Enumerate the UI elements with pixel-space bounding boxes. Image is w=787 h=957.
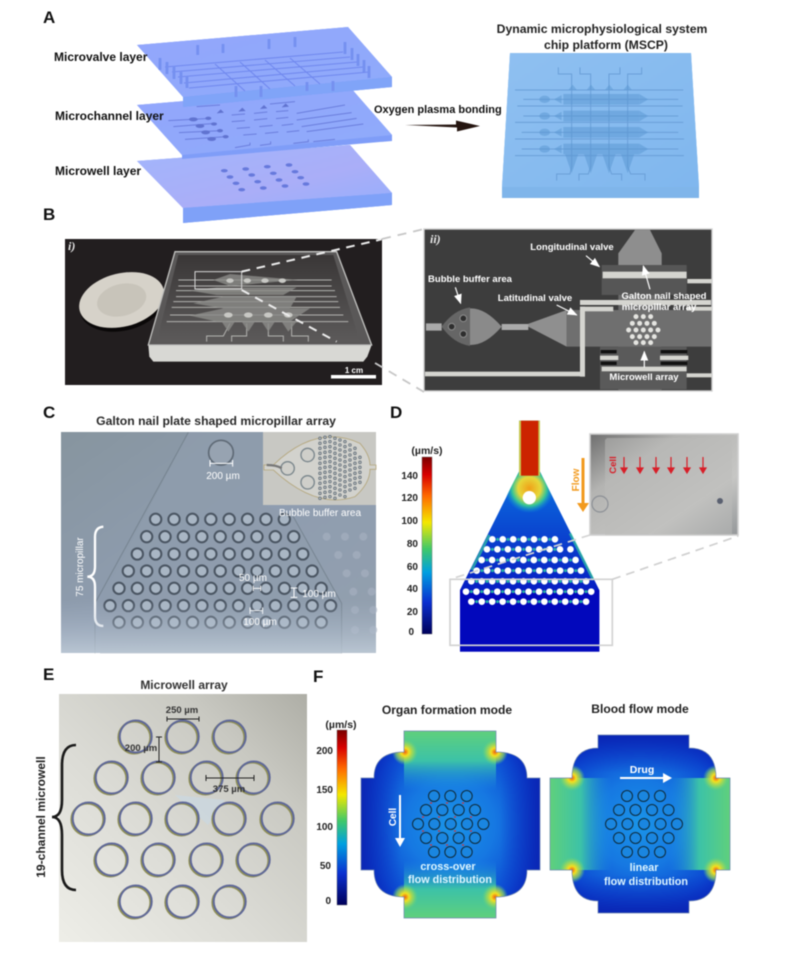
panel E: microwell array [34, 665, 307, 942]
faint background dots [327, 537, 375, 630]
drug arrow [620, 764, 672, 783]
letter B: B [43, 205, 55, 224]
dimension text: 250 µm [166, 705, 198, 716]
coin [73, 264, 171, 340]
microwell rings [71, 720, 294, 918]
rotated label E: 19-channel microwell [34, 756, 48, 878]
panel B: photographs [43, 205, 712, 392]
dimension text: 375 µm [213, 784, 245, 795]
letter F: F [313, 667, 323, 686]
C labels: 75 micropillar [75, 537, 86, 597]
well dots [221, 163, 309, 191]
colorbar D: 80 [407, 539, 418, 550]
dimension text [125, 705, 245, 795]
layer labels [54, 50, 164, 178]
microvalve layer plate [137, 27, 392, 107]
red arrows [621, 457, 706, 473]
C labels: 100 µm [243, 617, 277, 628]
mode caption [408, 861, 492, 886]
letter D: D [390, 403, 402, 422]
colorbar D: 100 [401, 516, 418, 527]
brace E [52, 745, 76, 890]
letter A: A [43, 8, 55, 27]
colorbar F: 0 [325, 896, 331, 907]
mode caption: linear [630, 862, 659, 874]
layer labels: Microchannel layer [55, 109, 164, 123]
inset: bubble buffer [263, 432, 376, 505]
panel C: micropillar array [43, 403, 376, 653]
panel A: exploded chip layers [43, 8, 707, 223]
simulation: blood flow [550, 735, 730, 913]
colorbar F [316, 719, 357, 907]
velocity field [450, 421, 738, 652]
photo ii: detail micrograph [424, 229, 712, 391]
colorbar D: 140 [401, 471, 418, 482]
scale bar [331, 366, 376, 378]
detail labels: Longitudinal valve [530, 242, 614, 253]
zoom box [195, 272, 242, 289]
colorbar D: 120 [401, 493, 418, 504]
simulation: organ formation [361, 731, 540, 918]
zoom rectangle [450, 579, 612, 645]
colorbar F: 150 [316, 785, 333, 796]
colorbar D: 40 [407, 584, 418, 595]
C labels: 50 µm [239, 573, 267, 584]
micrograph C [61, 432, 376, 653]
assembled chip [502, 53, 699, 198]
inset: cell photo: Cell [608, 456, 619, 474]
letter E: E [43, 665, 54, 684]
colorbar F: 200 [316, 746, 333, 757]
drug arrow: Drug [630, 764, 654, 776]
panel F: flow modes [313, 667, 730, 918]
detail labels: Latitudinal valve [498, 293, 572, 304]
large pillar [209, 440, 233, 465]
colorbar D: 60 [407, 562, 418, 573]
C labels: 100 µm [302, 589, 336, 600]
panel D: flow simulation [390, 403, 738, 652]
microwell layer plate [137, 145, 392, 223]
detail labels: Bubble buffer area [428, 274, 513, 285]
detail labels: Galton nail shaped [622, 291, 707, 302]
label ii: ii) [430, 232, 441, 246]
C labels: 200 µm [206, 471, 240, 482]
chip body [148, 345, 372, 362]
detail labels: Microwell array [609, 372, 679, 383]
dimension text: 200 µm [125, 743, 157, 754]
assembled chip title [497, 22, 707, 52]
colorbar D: (µm/s) [411, 445, 443, 457]
C labels: Bubble buffer area [279, 508, 361, 519]
flow arrow: Flow [571, 468, 582, 491]
pillar rings [110, 519, 331, 622]
heading: blood flow: Blood flow mode [591, 702, 689, 716]
well rings [418, 796, 484, 852]
dimension bars [210, 460, 297, 614]
microchannel layer plate [137, 87, 392, 159]
white brace [87, 527, 103, 626]
mode caption: flow distribution [604, 876, 688, 888]
cell arrow [388, 795, 405, 847]
flow arrow [571, 458, 589, 512]
photo i: chip with coin [65, 239, 382, 385]
colorbar F: 100 [316, 822, 333, 833]
colorbar F: 50 [320, 861, 331, 872]
bonding label: Oxygen plasma bonding [374, 104, 502, 116]
heading C: Galton nail plate shaped micropillar array [96, 414, 336, 428]
detail labels [428, 242, 707, 383]
colorbar F: (µm/s) [325, 719, 357, 731]
dashed guides [242, 239, 382, 342]
mode caption: cross-over [420, 861, 476, 873]
heading E: Microwell array [140, 678, 228, 692]
detail labels: micropillar array [622, 302, 697, 313]
letter C: C [43, 403, 55, 422]
inset: cell photo [590, 434, 738, 535]
colorbar D: 20 [407, 607, 418, 618]
label i: i) [68, 239, 75, 253]
C labels [75, 471, 361, 628]
heading: organ formation: Organ formation mode [382, 703, 512, 717]
dimension lines [156, 716, 254, 781]
dashed connectors to detail [375, 229, 424, 392]
cell arrow: Cell [388, 808, 399, 826]
micrograph E [59, 694, 307, 942]
assembled chip title: Dynamic microphysiological system [497, 22, 707, 36]
mode caption: flow distribution [408, 874, 492, 886]
mode caption [604, 862, 688, 888]
scale bar: 1 cm [345, 366, 363, 375]
assembled chip title: chip platform (MSCP) [544, 38, 668, 52]
arrow: bonding [405, 120, 480, 132]
layer labels: Microvalve layer [54, 50, 148, 64]
colorbar D [401, 445, 443, 638]
colorbar D: 0 [408, 627, 414, 638]
layer labels: Microwell layer [55, 164, 141, 178]
well rings [611, 796, 678, 852]
